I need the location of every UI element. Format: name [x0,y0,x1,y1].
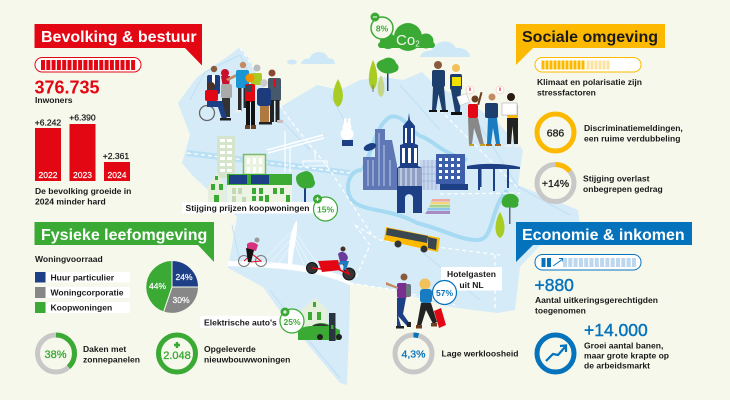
police officers [429,61,462,115]
text: discriminatie: een ruime verdubbeling [584,134,680,144]
pie chart: housing: 44% [149,281,166,291]
donut: 686: 686 [547,128,564,140]
badge 57% [432,280,456,304]
population label: Inwoners [35,95,73,105]
bar chart: population growth: 2022 [39,170,58,180]
electric car, house and charger [298,298,342,341]
label: hotelgasten [441,267,502,290]
city centre buildings [363,113,520,213]
bar chart: population growth: 2023 [73,170,92,180]
legend: housing: Huur particulier [50,272,115,282]
text: overlast: Stijging overlast [583,174,650,184]
rainbow crossing [425,199,450,214]
legend: housing: Woningcorporatie [50,288,124,298]
donut: 2.048 [158,335,196,372]
pie chart: housing: 30% [172,295,190,305]
label: hotelgasten: uit NL [459,280,484,290]
pie chart: housing [146,260,198,313]
badge 15% [313,194,338,221]
banner: Sociale omgeving [516,24,665,65]
co2 cloud: Co [396,32,415,49]
text: nieuwbouw: nieuwbouwwoningen [204,354,290,364]
tourists [386,274,446,328]
text: discriminatie: Discriminatiemeldingen, [584,123,683,133]
protesters [457,86,521,147]
co2 cloud [370,12,435,51]
population pill icon [35,58,141,72]
banner: Bevolking & bestuur: Bevolking & bestuur [41,29,197,46]
benefits number: +880 [534,275,574,295]
crane [267,131,327,172]
text: stressfactoren: Klimaat en polarisatie zijn [537,77,642,87]
stress pill icon [535,58,641,72]
bus [384,227,440,252]
text: banen: de arbeidsmarkt [584,360,650,370]
trees top [333,58,399,107]
bar chart: population growth: +6.242 [35,118,61,128]
text: banen: maar grote krapte op [584,350,669,360]
donut: 4,3%: 4,3% [402,348,425,360]
legend: housing: Koopwoningen [50,302,112,312]
people group: residents [200,62,283,129]
badge 25%: 25% [283,317,301,327]
co2 cloud: 2 [415,40,420,48]
population note: 2024 minder hard [35,196,106,206]
cargo bike [306,246,355,280]
bridge [228,220,350,285]
donut: 4,3% [395,335,432,372]
banner: Sociale omgeving: Sociale omgeving [522,29,658,46]
badge 15%: 15% [317,204,334,214]
population number: 376.735 [34,78,100,98]
donut: 38% [38,335,74,372]
text: zonnepanelen: Daken met [83,344,126,354]
text: banen: Groei aantal banen, [584,340,663,350]
donut: 686 [537,114,574,151]
green buildings [208,136,315,213]
bar chart: population growth [35,112,130,181]
jobs number: +14.000 [584,320,648,340]
bar chart: population growth: +6.390 [69,112,96,122]
benefits pill icon [535,254,641,270]
icon: growth arrow [537,335,574,372]
badge 25% [280,308,304,333]
text: nieuwbouw: Opgeleverde [204,344,256,354]
banner: Fysieke leefomgeving [34,222,214,262]
banner: Economie & inkomen [516,222,692,262]
label: koopwoningen price: Stijging prijzen koopwoningen [186,203,309,213]
label: elektrische auto's: Elektrische auto's [204,318,277,328]
text: uitkeringsgerechtigden: toegenomen [535,306,586,316]
banner: Bevolking & bestuur [34,24,202,66]
donut: +14% [537,164,574,202]
badge 57%: 57% [436,288,453,298]
pie chart: housing: 24% [175,272,193,282]
tree right [496,194,519,238]
text: zonnepanelen: zonnepanelen [83,354,140,364]
text: werkloosheid: Lage werkloosheid [442,348,518,358]
banner: Economie & inkomen: Economie & inkomen [522,227,685,244]
legend: housing [35,272,130,313]
donut: +14%: +14% [542,178,569,190]
text: overlast: onbegrepen gedrag [583,184,663,194]
donut: 2.048: 2.048 [163,350,191,362]
donut: 38%: 38% [44,349,67,361]
bar chart: population growth: 2024 [108,170,127,180]
clouds [287,41,470,64]
text: stressfactoren: stressfactoren [537,88,596,98]
miffy statue [340,118,354,146]
population note: De bevolking groeide in [35,186,131,196]
co2 cloud: 8% [376,24,389,34]
city map [178,47,580,385]
bar chart: population growth: +2.361 [103,151,129,161]
label: hotelgasten: Hotelgasten [447,269,496,279]
cyclist [238,238,266,266]
text: uitkeringsgerechtigden: Aantal uitkeringsgerechtigden [535,295,658,305]
banner: Fysieke leefomgeving: Fysieke leefomgeving [41,227,207,244]
heading: Woningvoorraad: Woningvoorraad [35,254,103,264]
